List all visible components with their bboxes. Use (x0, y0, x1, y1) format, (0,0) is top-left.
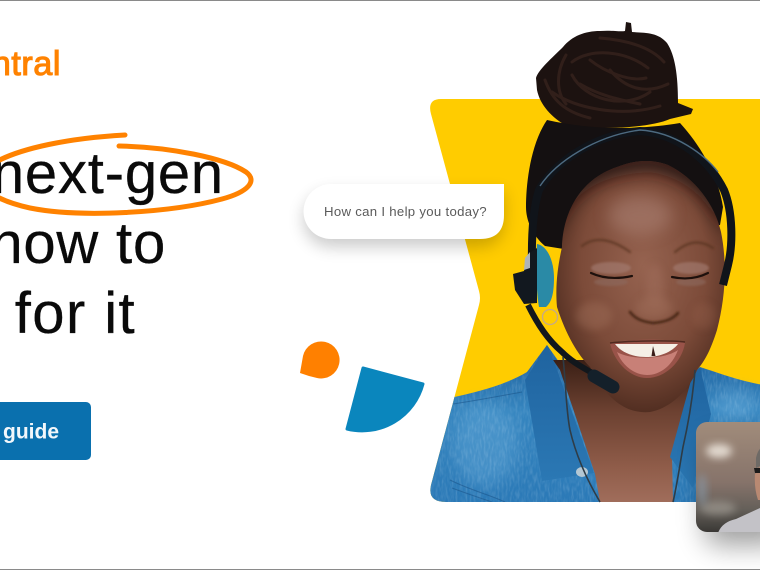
face (556, 161, 724, 412)
eyelids (591, 262, 709, 286)
denim shirt (425, 345, 760, 510)
cords (563, 357, 695, 502)
heading line: for it: for it (15, 281, 136, 346)
eyebrows (582, 240, 713, 252)
smile (610, 340, 685, 378)
man's face (755, 464, 760, 500)
shirt collars (525, 345, 711, 488)
bubble text: How can I help you today? (324, 204, 487, 219)
tile photo (696, 422, 760, 533)
button: read the guide (0, 402, 91, 460)
button shape (0, 402, 91, 460)
yellow chevron panel (430, 99, 760, 502)
earring (542, 310, 558, 324)
shirt button (576, 467, 588, 477)
chat bubble (304, 184, 504, 247)
ellipse upper stroke (0, 135, 125, 163)
frame line: bottom (0, 569, 760, 570)
photo: woman with headset (425, 22, 760, 510)
man's shirt (718, 508, 760, 533)
headset (513, 130, 731, 502)
decorative shape: orange drop (300, 341, 340, 378)
nose (630, 296, 678, 323)
bubble body (304, 184, 504, 239)
button label: guide (3, 420, 59, 444)
orange hand-drawn ellipse around next-gen (0, 135, 251, 213)
speaker housing (513, 248, 537, 304)
hair bun (536, 22, 693, 128)
neck and chest (553, 360, 695, 502)
decorative shape: blue quarter circle (347, 368, 423, 431)
microphone head (594, 376, 613, 387)
ear cup (536, 244, 554, 307)
video call tile (696, 422, 760, 545)
hair on head (526, 120, 723, 250)
closed eyes (591, 273, 708, 278)
headband (532, 131, 731, 290)
ellipse main stroke (0, 146, 251, 213)
frame line: top (0, 0, 760, 1)
microphone boom (528, 305, 594, 374)
heading (0, 141, 224, 346)
tile shadow (705, 440, 760, 545)
bubble shadow (304, 192, 504, 247)
